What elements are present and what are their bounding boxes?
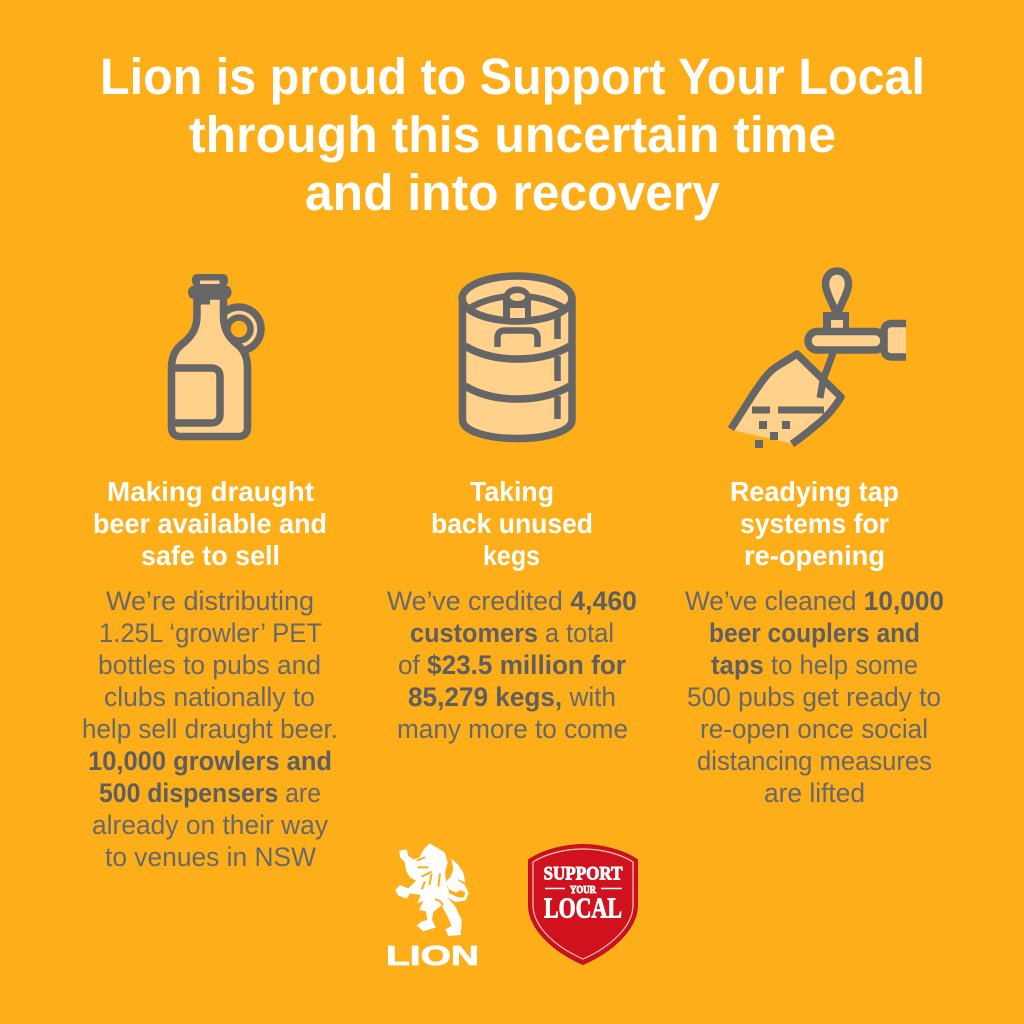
column 3 body text: re-open once social	[700, 714, 928, 744]
column 3 body text	[685, 586, 944, 808]
column 1 heading	[93, 476, 327, 571]
title: through this uncertain time	[189, 106, 836, 163]
column 3 body text: are lifted	[764, 778, 865, 808]
column 1 body text: to venues in NSW	[105, 842, 316, 872]
column 1 body text: bottles to pubs and	[98, 650, 321, 680]
column 3 body text: taps to help some	[711, 650, 918, 680]
column 3 body text: We’ve cleaned 10,000	[685, 586, 944, 616]
logo: Support Your Local shield: LOCAL	[544, 892, 622, 924]
column 2 body text: 85,279 kegs, with	[408, 682, 616, 712]
logo: Support Your Local shield	[529, 845, 637, 964]
column 3 body text: distancing measures	[697, 746, 932, 776]
logo: Support Your Local shield: YOUR	[570, 885, 596, 896]
column 2 body text: We’ve credited 4,460	[387, 586, 637, 616]
column 1 body text: clubs nationally to	[104, 682, 315, 712]
column 2 body text: many more to come	[397, 714, 628, 744]
column 1 body text: 10,000 growlers and	[88, 746, 332, 776]
title: and into recovery	[305, 164, 721, 221]
column 1 heading: safe to sell	[141, 540, 280, 571]
lion emblem	[395, 843, 469, 936]
column 3 heading	[730, 476, 899, 571]
column 2 heading	[431, 476, 593, 571]
logo: Lion	[386, 843, 479, 971]
column 3 body text: beer couplers and	[709, 618, 920, 648]
column 3 body text: 500 pubs get ready to	[687, 682, 941, 712]
column 2 body text: of $23.5 million for	[398, 650, 626, 680]
logo: Lion: LION	[386, 940, 479, 971]
column 1 body text: help sell draught beer.	[82, 714, 338, 744]
column 1 heading: Making draught	[107, 476, 314, 507]
icon: beer keg	[462, 276, 572, 438]
column 1 body text: 500 dispensers are	[99, 778, 321, 808]
column 3 heading: systems for	[740, 508, 889, 539]
column 1 body text	[82, 586, 338, 872]
column 3 heading: re-opening	[744, 540, 885, 571]
column 2 heading: Taking	[470, 476, 554, 507]
icon: beer tap and glass	[731, 271, 906, 448]
title	[100, 48, 925, 221]
column 1 body text: already on their way	[92, 810, 329, 840]
column 2 heading: back unused	[431, 508, 593, 539]
logo: Support Your Local shield: SUPPORT	[544, 864, 623, 884]
column 1 body text: We’re distributing	[106, 586, 314, 616]
column 3 heading: Readying tap	[730, 476, 899, 507]
title: Lion is proud to Support Your Local	[100, 48, 925, 105]
column 2 heading: kegs	[483, 540, 540, 571]
column 2 body text: customers a total	[410, 618, 614, 648]
column 2 body text	[387, 586, 637, 744]
icon: growler bottle	[172, 274, 261, 436]
column 1 heading: beer available and	[93, 508, 327, 539]
column 1 body text: 1.25L ‘growler’ PET	[99, 618, 322, 648]
